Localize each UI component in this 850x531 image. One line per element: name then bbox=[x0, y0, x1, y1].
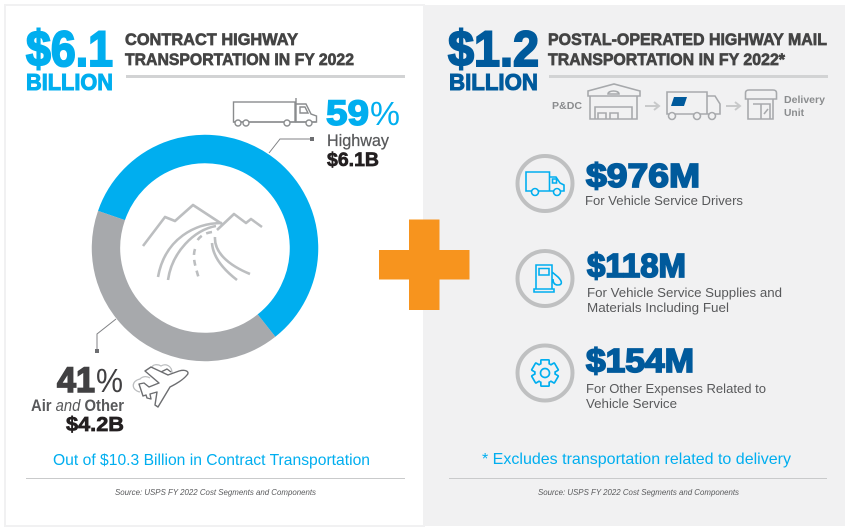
item: other vehicle service expenses: Vehicle Service bbox=[586, 397, 677, 411]
icon: orange plus bbox=[379, 220, 470, 310]
headline figure: $6.1 billion: BILLION bbox=[26, 69, 113, 95]
callout: highway share: $6.1B bbox=[327, 150, 379, 171]
item: vehicle service drivers: $976M bbox=[586, 157, 700, 194]
item: vehicle service supplies and fuel: Materials Including Fuel bbox=[587, 301, 729, 315]
heading: contract highway transportation: CONTRACT HIGHWAY bbox=[125, 30, 299, 49]
headline figure: $1.2 billion: $1.2 bbox=[448, 21, 539, 77]
item: vehicle service supplies and fuel bbox=[518, 247, 782, 315]
panel: contract highway transportation bbox=[5, 5, 424, 526]
icon: semi truck bbox=[233, 98, 316, 126]
label: delivery unit bbox=[784, 94, 825, 119]
donut chart: 59% highway, 41% air and other bbox=[106, 149, 304, 347]
arrow bbox=[645, 102, 659, 110]
label: P&DC: P&DC bbox=[552, 101, 582, 112]
flow diagram: P&DC to delivery unit bbox=[552, 84, 825, 120]
icon: mountain road bbox=[143, 205, 262, 280]
label: delivery unit: Delivery bbox=[784, 94, 825, 106]
heading: contract highway transportation bbox=[125, 30, 354, 69]
label: delivery unit: Unit bbox=[784, 107, 804, 119]
icon: fuel pump bbox=[518, 251, 572, 306]
icon: processing facility bbox=[588, 84, 640, 119]
item: vehicle service drivers bbox=[518, 156, 743, 211]
note: excludes delivery: * Excludes transportation related to delivery bbox=[482, 451, 791, 468]
icon: postal truck bbox=[667, 92, 720, 120]
heading: postal-operated highway mail: TRANSPORTATION IN FY 2022* bbox=[548, 50, 785, 69]
callout: highway share: 59 bbox=[326, 94, 369, 133]
arrow bbox=[726, 102, 740, 110]
item: other vehicle service expenses: For Other Expenses Related to bbox=[586, 382, 766, 396]
callout: air and other share: Air and Other bbox=[31, 396, 124, 415]
icon: airplane with clouds bbox=[133, 365, 188, 407]
headline figure: $6.1 billion: $6.1 bbox=[26, 21, 113, 77]
icon: delivery unit store bbox=[746, 90, 776, 119]
callout: air and other share: $4.2B bbox=[66, 414, 124, 436]
item: vehicle service supplies and fuel: $118M bbox=[587, 247, 686, 284]
icon: delivery truck bbox=[518, 156, 572, 211]
icon: gear bbox=[518, 346, 572, 400]
source: right panel: Source: USPS FY 2022 Cost Segments and Components bbox=[538, 488, 739, 497]
item: vehicle service drivers: For Vehicle Service Drivers bbox=[585, 194, 743, 208]
heading: postal-operated highway mail: POSTAL-OPERATED HIGHWAY MAIL bbox=[548, 30, 827, 49]
panel: postal-operated highway mail transportation bbox=[424, 5, 845, 526]
note: contract transportation total: Out of $10.3 Billion in Contract Transportation bbox=[53, 452, 370, 469]
heading: contract highway transportation: TRANSPORTATION IN FY 2022 bbox=[125, 50, 354, 69]
callout: highway share: Highway bbox=[327, 131, 389, 150]
item: other vehicle service expenses: $154M bbox=[586, 342, 694, 379]
callout: highway share bbox=[269, 94, 400, 171]
heading: postal-operated highway mail bbox=[548, 30, 827, 69]
headline figure: $6.1 billion bbox=[26, 21, 113, 95]
callout: air and other share: 41 bbox=[57, 361, 95, 400]
callout: highway share: % bbox=[370, 95, 400, 132]
item: other vehicle service expenses bbox=[518, 342, 766, 411]
source: left panel: Source: USPS FY 2022 Cost Segments and Components bbox=[115, 488, 316, 497]
callout: air and other share: % bbox=[96, 362, 123, 399]
headline figure: $1.2 billion: BILLION bbox=[449, 69, 538, 95]
item: vehicle service supplies and fuel: For Vehicle Service Supplies and bbox=[587, 286, 782, 300]
callout: air and other share bbox=[31, 319, 124, 436]
